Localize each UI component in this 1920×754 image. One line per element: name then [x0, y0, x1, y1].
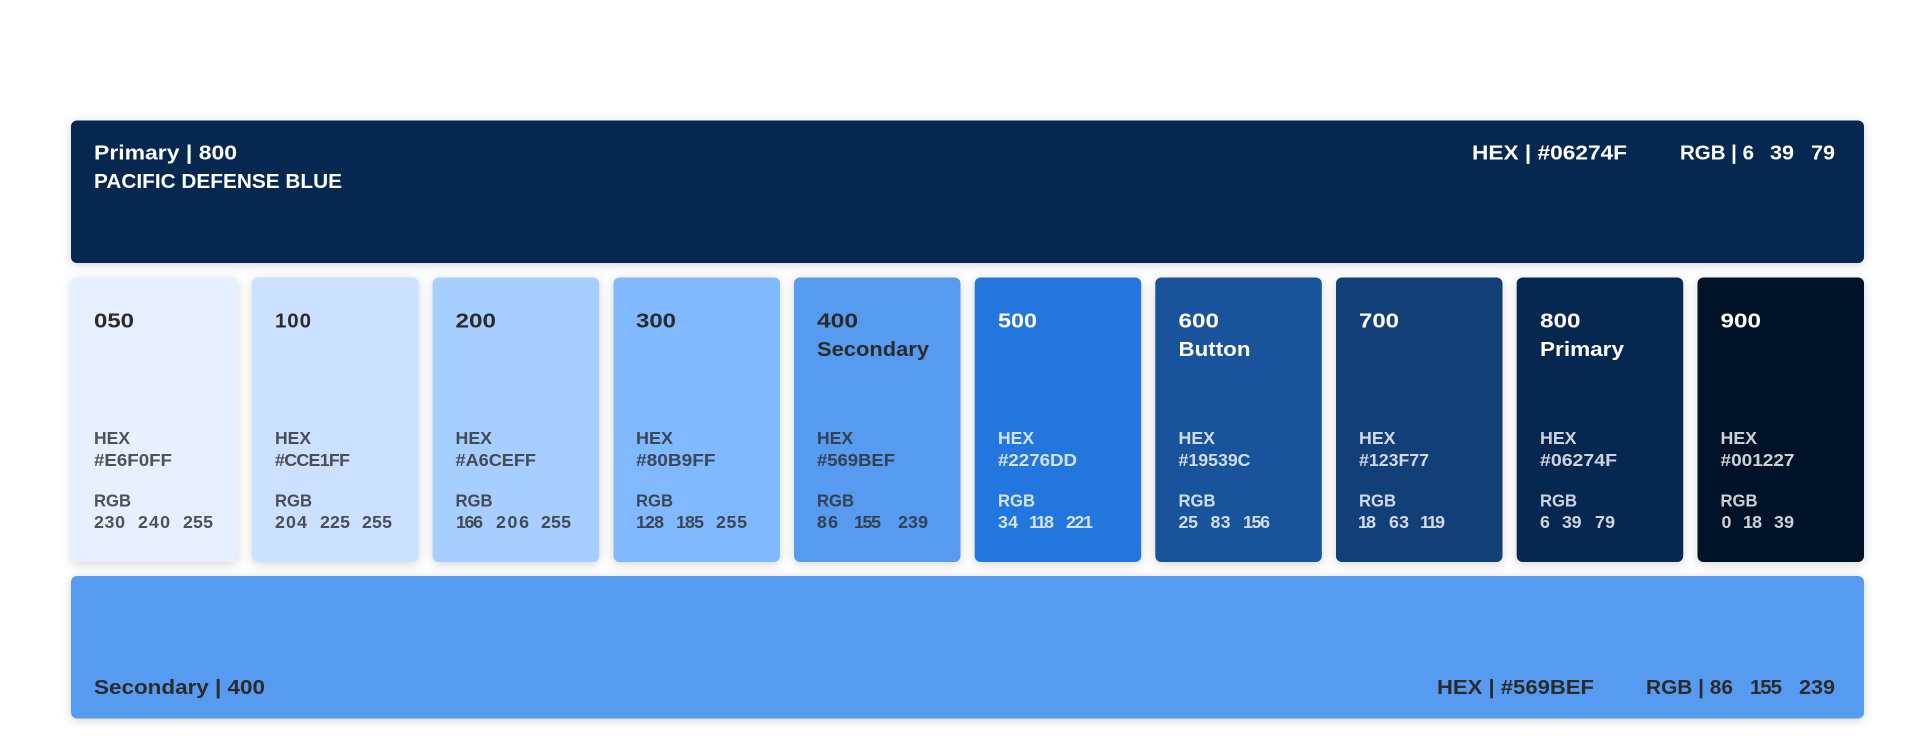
rgb value [94, 490, 213, 532]
shade label: 400 [817, 310, 858, 332]
hex value: #E6F0FF [94, 450, 172, 470]
hex value: #19539C [1178, 450, 1251, 470]
shade label: Secondary [817, 338, 930, 361]
hex value: #2276DD [998, 450, 1077, 470]
rgb value: 239 [898, 512, 928, 532]
primary rgb value: RGB | 6 [1680, 142, 1754, 164]
panel: secondary 400 banner [71, 576, 1864, 718]
rgb value: 230 [94, 512, 125, 532]
rgb value: RGB [275, 490, 312, 510]
card: 600 button [1155, 278, 1322, 562]
shade label: 300 [636, 310, 676, 332]
rgb value: 255 [183, 512, 213, 532]
rgb value: 255 [541, 512, 571, 532]
rgb value [998, 490, 1093, 532]
rgb value [1358, 490, 1445, 532]
secondary rgb value: 155 [1750, 676, 1782, 699]
hex value [1720, 428, 1795, 470]
rgb value: 204 [275, 512, 307, 532]
rgb value: RGB [1178, 490, 1216, 510]
rgb value: 79 [1595, 512, 1615, 532]
rgb value: 240 [138, 512, 170, 532]
rgb value: 86 [817, 512, 838, 532]
shade label: 500 [998, 310, 1037, 332]
rgb value: 18 [1358, 512, 1376, 532]
shade label: 700 [1359, 310, 1399, 332]
card: 500 [975, 278, 1141, 562]
hex value [94, 428, 172, 470]
hex value: #A6CEFF [456, 450, 536, 470]
rgb value: 6 [1540, 512, 1550, 532]
rgb value: 39 [1774, 512, 1794, 532]
rgb value: 255 [362, 512, 392, 532]
hex value [1540, 428, 1617, 470]
card: 400 secondary [794, 278, 960, 562]
panel: primary 800 banner [71, 120, 1864, 263]
hex value: #569BEF [817, 450, 895, 470]
rgb value: 128 [636, 512, 664, 532]
shade label: 200 [456, 310, 496, 332]
secondary rgb value [1646, 676, 1835, 699]
hex value: HEX [1359, 428, 1396, 448]
rgb value: RGB [1720, 490, 1758, 510]
rgb value: RGB [817, 490, 854, 510]
rgb value: 25 [1178, 512, 1198, 532]
primary rgb value [1680, 142, 1835, 164]
hex value: HEX [1178, 428, 1215, 448]
shade label: 600 [1178, 310, 1219, 332]
hex value: HEX [998, 428, 1034, 448]
rgb value: 118 [1029, 512, 1054, 532]
primary rgb value: 39 [1770, 142, 1794, 164]
primary rgb value: 79 [1811, 142, 1835, 164]
shade label: 800 [1540, 310, 1580, 332]
rgb value: RGB [1540, 490, 1577, 510]
rgb value [275, 490, 392, 532]
rgb value: 83 [1210, 512, 1231, 532]
rgb value [817, 490, 928, 532]
shade label [817, 310, 930, 361]
rgb value [1540, 490, 1615, 532]
hex value [1359, 428, 1429, 470]
shade label [1540, 310, 1625, 361]
hex value: #123F77 [1359, 450, 1429, 470]
hex value [636, 428, 716, 470]
rgb value: RGB [94, 490, 131, 510]
rgb value [636, 490, 747, 532]
rgb value: 225 [320, 512, 350, 532]
rgb value: 39 [1562, 512, 1582, 532]
card: 300 [614, 278, 780, 562]
card: 100 [252, 278, 418, 562]
rgb value: 206 [496, 512, 529, 532]
primary name: Primary | 800 [94, 142, 237, 164]
rgb value [1720, 490, 1794, 532]
primary name: PACIFIC DEFENSE BLUE [94, 170, 342, 193]
rgb value: 166 [456, 512, 483, 532]
secondary hex value: HEX | #569BEF [1437, 676, 1594, 699]
secondary rgb value: 239 [1799, 676, 1835, 699]
rgb value: RGB [636, 490, 673, 510]
rgb value: 63 [1389, 512, 1409, 532]
rgb value: 255 [716, 512, 747, 532]
rgb value: 18 [1743, 512, 1762, 532]
rgb value: 155 [854, 512, 881, 532]
rgb value: 0 [1722, 512, 1732, 532]
hex value: HEX [94, 428, 130, 448]
primary name [94, 142, 342, 193]
rgb value: 185 [676, 512, 704, 532]
rgb value: 34 [998, 512, 1018, 532]
hex value [275, 428, 350, 470]
rgb value: RGB [1359, 490, 1396, 510]
hex value: HEX [1540, 428, 1577, 448]
card: 050 [71, 278, 238, 562]
rgb value [1178, 490, 1270, 532]
card: 900 [1698, 278, 1864, 562]
hex value: #CCE1FF [275, 450, 350, 470]
shade label: 100 [275, 310, 311, 332]
shade label: Button [1178, 338, 1250, 361]
hex value: HEX [1720, 428, 1757, 448]
secondary rgb value: RGB | 86 [1646, 676, 1733, 699]
secondary name: Secondary | 400 [94, 676, 265, 699]
hex value: #80B9FF [636, 450, 716, 470]
hex value [1178, 428, 1251, 470]
rgb value: RGB [456, 490, 493, 510]
hex value: HEX [275, 428, 311, 448]
rgb value: 221 [1066, 512, 1093, 532]
shade label: Primary [1540, 338, 1625, 361]
rgb value [456, 490, 571, 532]
shade label: 900 [1720, 310, 1761, 332]
card: 200 [433, 278, 599, 562]
rgb value: 156 [1243, 512, 1270, 532]
hex value [998, 428, 1077, 470]
shade label [1178, 310, 1250, 361]
hex value [817, 428, 895, 470]
card: 800 primary [1517, 278, 1683, 562]
hex value: #001227 [1720, 450, 1795, 470]
primary hex value: HEX | #06274F [1472, 142, 1627, 164]
rgb value: RGB [998, 490, 1035, 510]
shade label: 050 [94, 310, 134, 332]
hex value: HEX [636, 428, 673, 448]
rgb value: 119 [1420, 512, 1445, 532]
hex value [456, 428, 536, 470]
hex value: HEX [817, 428, 853, 448]
hex value: #06274F [1540, 450, 1617, 470]
hex value: HEX [456, 428, 492, 448]
card: 700 [1336, 278, 1502, 562]
